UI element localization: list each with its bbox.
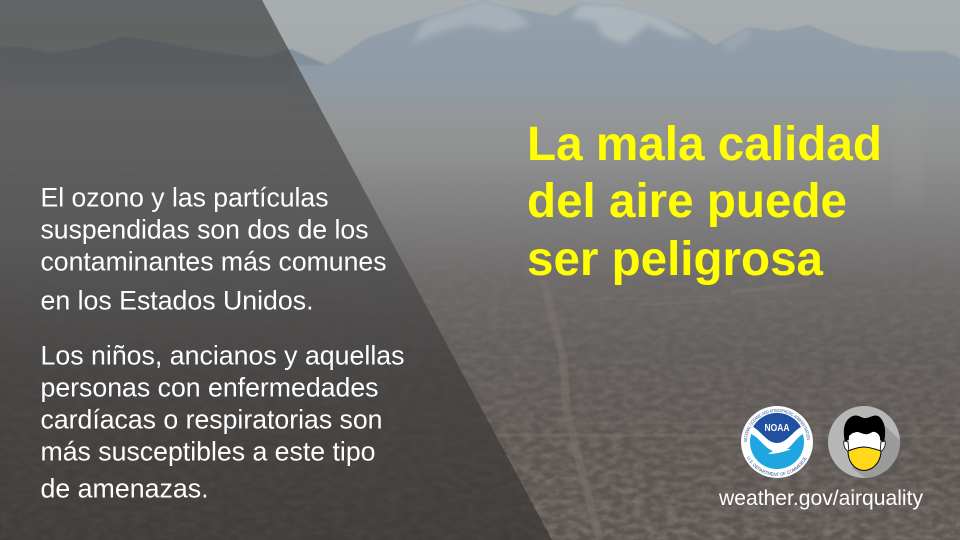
icon: person wearing yellow mask xyxy=(828,406,900,480)
icon: NOAA logo: U.S. DEPARTMENT OF COMMERCE xyxy=(747,456,807,476)
body text: vulnerable groups: de amenazas. xyxy=(40,474,208,504)
headline: La mala calidad xyxy=(527,118,882,171)
icon: NOAA logo: NOAA xyxy=(764,422,790,434)
main mountains xyxy=(291,0,960,118)
headline: del aire puede xyxy=(527,175,847,228)
haze band on right xyxy=(895,85,923,205)
body text: pollutants: en los Estados Unidos. xyxy=(40,286,314,316)
body text: vulnerable groups: Los niños, ancianos y aquellas xyxy=(40,340,404,370)
dark diagonal panel xyxy=(0,0,552,540)
city ground texture xyxy=(5,308,960,540)
icon: NOAA logo xyxy=(741,406,813,478)
headline: ser peligrosa xyxy=(527,233,823,286)
website url: weather.gov/airquality xyxy=(718,486,923,510)
roads and fields xyxy=(407,280,960,540)
distant mountains behind panel xyxy=(0,36,327,110)
body text: pollutants: contaminantes más comunes xyxy=(40,246,386,276)
body text: pollutants: El ozono y las partículas xyxy=(40,182,328,212)
body text: vulnerable groups: cardíacas o respiratorias son xyxy=(40,404,382,434)
snow caps xyxy=(412,1,752,52)
body text: vulnerable groups: personas con enfermedades xyxy=(40,372,378,402)
body text: pollutants: suspendidas son dos de los xyxy=(40,214,368,244)
body text: vulnerable groups: más susceptibles a este tipo xyxy=(40,436,376,466)
icon: NOAA logo: NATIONAL OCEANIC AND ATMOSPHERIC ADMINISTRATION xyxy=(744,408,810,442)
